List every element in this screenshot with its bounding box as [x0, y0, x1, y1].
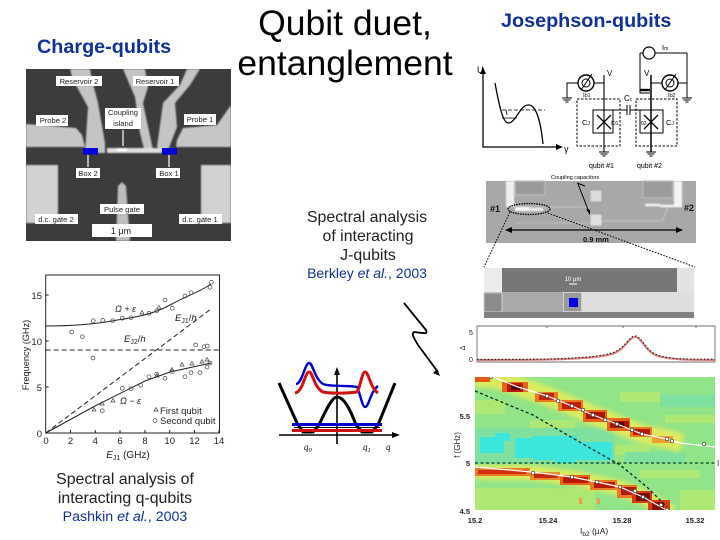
- micrograph: charge qubits: Reservoir 2: [60, 77, 98, 86]
- chart: frequency vs EJ1: 0: [43, 436, 49, 447]
- chart: frequency vs EJ1: h: [140, 334, 146, 345]
- micrograph: charge qubits: d.c. gate 2: [38, 215, 74, 224]
- chart: delta peak: 5: [469, 330, 473, 337]
- chart: frequency vs EJ1: E: [175, 313, 182, 324]
- chart: frequency vs EJ1: 10: [164, 436, 175, 447]
- chart: frequency vs EJ1: 8: [142, 436, 148, 447]
- chart: frequency vs EJ1: Second qubit: [160, 416, 216, 427]
- chart: frequency vs EJ1: (GHz): [120, 450, 150, 461]
- micrograph: charge qubits: Box 1: [159, 169, 179, 178]
- micrograph: qubit chip: #2: [684, 203, 694, 213]
- heading: Josephson-qubits: Josephson-qubits: [501, 10, 671, 32]
- chart: frequency vs EJ1: 0: [37, 429, 42, 440]
- heading: Charge-qubits: Charge-qubits: [37, 36, 171, 58]
- diagram: washboard potential: γ: [564, 144, 569, 154]
- micrograph: qubit chip: 0.9 mm: [583, 235, 609, 244]
- labels: q axis: q: [304, 442, 308, 452]
- chart: spectroscopy heatmap: 15.32: [686, 516, 704, 525]
- micrograph: charge qubits: 1 μm: [111, 226, 131, 236]
- chart: frequency vs EJ1: First qubit: [160, 406, 202, 417]
- labels: circuit: I01: [611, 120, 619, 127]
- diagram: washboard potential: U: [477, 65, 484, 75]
- chart: frequency vs EJ1: 4: [93, 436, 98, 447]
- bottom spectral band cells: [475, 468, 670, 512]
- qubit 1 box: [577, 75, 620, 156]
- qubit 1 source: [562, 74, 604, 102]
- labels: circuit: Cc: [624, 94, 633, 103]
- text block: spectral analysis J-qubits: [307, 209, 427, 281]
- chart: frequency vs EJ1: J1: [181, 318, 189, 325]
- chart: frequency vs EJ1: 6: [117, 436, 123, 447]
- title: [237, 3, 453, 83]
- chart: frequency vs EJ1: 5: [37, 383, 42, 394]
- chart: spectroscopy heatmap: 5: [466, 459, 470, 468]
- chart: frequency vs EJ1: 10: [31, 337, 42, 348]
- labels: q axis: 0: [308, 447, 312, 454]
- labels: circuit: qubit #2: [637, 163, 662, 170]
- chart: frequency vs EJ1: /: [138, 334, 141, 345]
- micrograph: charge qubits: [26, 69, 231, 241]
- micrograph: charge qubits: Coupling: [108, 108, 138, 117]
- zoom guide lines: [484, 212, 695, 267]
- labels: circuit: qubit #1: [589, 163, 614, 170]
- labels: circuit: V: [607, 69, 613, 78]
- labels: circuit: Ib1: [583, 92, 591, 99]
- chart: spectroscopy heatmap: 15.2: [468, 516, 482, 525]
- qubit 2 source: [651, 53, 692, 102]
- chart: spectroscopy heatmap: [453, 375, 719, 538]
- chart: spectroscopy heatmap: 15.28: [613, 516, 631, 525]
- labels: circuit: Im: [662, 43, 668, 52]
- chart: frequency vs EJ1: 2: [68, 436, 73, 447]
- diagram: double well with wave functions: [279, 363, 400, 444]
- arrow: microwave zigzag: [404, 303, 440, 376]
- micrograph: charge qubits: Reservoir 1: [136, 77, 174, 86]
- text block: spectral analysis J-qubits: J-qubits: [340, 247, 396, 264]
- measurement source: [640, 47, 687, 93]
- micrograph: charge qubits: Probe 2: [40, 116, 66, 125]
- micrograph: charge qubits: Probe 1: [187, 115, 213, 124]
- micrograph: charge qubits: island: [113, 119, 133, 128]
- chart: spectroscopy heatmap: f (GHz): [453, 432, 462, 458]
- chart: delta peak: [460, 326, 715, 364]
- micrograph: qubit chip: #1: [490, 204, 500, 214]
- labels: q axis: q: [386, 442, 391, 452]
- diagram: washboard potential: [477, 65, 569, 154]
- chart: frequency vs EJ1: 12: [189, 436, 200, 447]
- chart: frequency vs EJ1: h: [191, 313, 197, 324]
- chart: frequency vs EJ1: Ω − ε: [120, 396, 142, 406]
- title: entanglement: [237, 43, 453, 83]
- chart: frequency vs EJ1: /: [189, 313, 192, 324]
- labels: circuit: CJ: [666, 118, 674, 127]
- chart: spectroscopy heatmap: 5.5: [460, 412, 470, 421]
- chart: frequency vs EJ1: [21, 275, 224, 462]
- boxes: [83, 148, 98, 154]
- text block: spectral analysis q-qubits: [56, 471, 194, 525]
- chart: delta peak: 0: [469, 357, 473, 364]
- chart: frequency vs EJ1: 15: [31, 291, 42, 302]
- chart: frequency vs EJ1: Frequency (GHz): [21, 320, 31, 390]
- text block: spectral analysis q-qubits: Pashkin et al., 2003: [63, 509, 187, 525]
- text block: spectral analysis J-qubits: Berkley et al., 2003: [307, 265, 427, 281]
- text block: spectral analysis J-qubits: of interacting: [323, 228, 413, 245]
- labels: q axis: [304, 442, 391, 454]
- labels: circuit: Coupling capacitors: [551, 175, 600, 181]
- chart: frequency vs EJ1: E: [106, 450, 113, 461]
- chart: spectroscopy heatmap: I: [717, 459, 719, 468]
- labels: circuit: CJ: [582, 118, 590, 127]
- labels: circuit: V: [644, 69, 650, 78]
- micrograph: charge qubits: Pulse gate: [104, 205, 140, 214]
- labels: q axis: 1: [368, 447, 371, 454]
- chart: frequency vs EJ1: Ω + ε: [115, 304, 137, 314]
- text block: spectral analysis q-qubits: Spectral analysis of: [56, 471, 194, 488]
- text block: spectral analysis J-qubits: Spectral analysis: [307, 209, 427, 226]
- chart: frequency vs EJ1: E: [124, 334, 131, 345]
- micrograph: junction close-up: 10 μm: [565, 277, 581, 283]
- labels: circuit: Ib2: [668, 92, 676, 99]
- top spectral band cells: [475, 377, 673, 443]
- chart: frequency vs EJ1: J1: [113, 455, 120, 462]
- chart: frequency vs EJ1: J2: [130, 339, 138, 346]
- diagram: qubit circuit: [562, 47, 692, 156]
- micrograph: qubit chip: [486, 181, 696, 244]
- micrograph: junction close-up: [484, 268, 694, 318]
- title: Qubit duet,: [258, 3, 432, 43]
- coupling capacitor: [613, 105, 640, 115]
- chart: delta peak: Δ: [460, 345, 467, 350]
- chart: spectroscopy heatmap: 15.24: [539, 516, 558, 525]
- chart: spectroscopy heatmap: I: [580, 526, 582, 536]
- chart: spectroscopy heatmap: (μA): [590, 526, 608, 536]
- qubit 2 box: [636, 75, 677, 156]
- labels: q axis: q: [363, 442, 368, 452]
- chart: frequency vs EJ1: 14: [214, 436, 224, 447]
- micrograph: charge qubits: d.c. gate 1: [182, 215, 218, 224]
- micrograph: charge qubits: Box 2: [78, 169, 98, 178]
- text block: spectral analysis q-qubits: interacting q-qubits: [58, 490, 192, 507]
- labels: circuit: I02: [639, 120, 647, 127]
- chart: spectroscopy heatmap: 4.5: [460, 507, 470, 516]
- labels: circuit: [551, 43, 676, 181]
- chart: spectroscopy heatmap: b2: [582, 531, 590, 538]
